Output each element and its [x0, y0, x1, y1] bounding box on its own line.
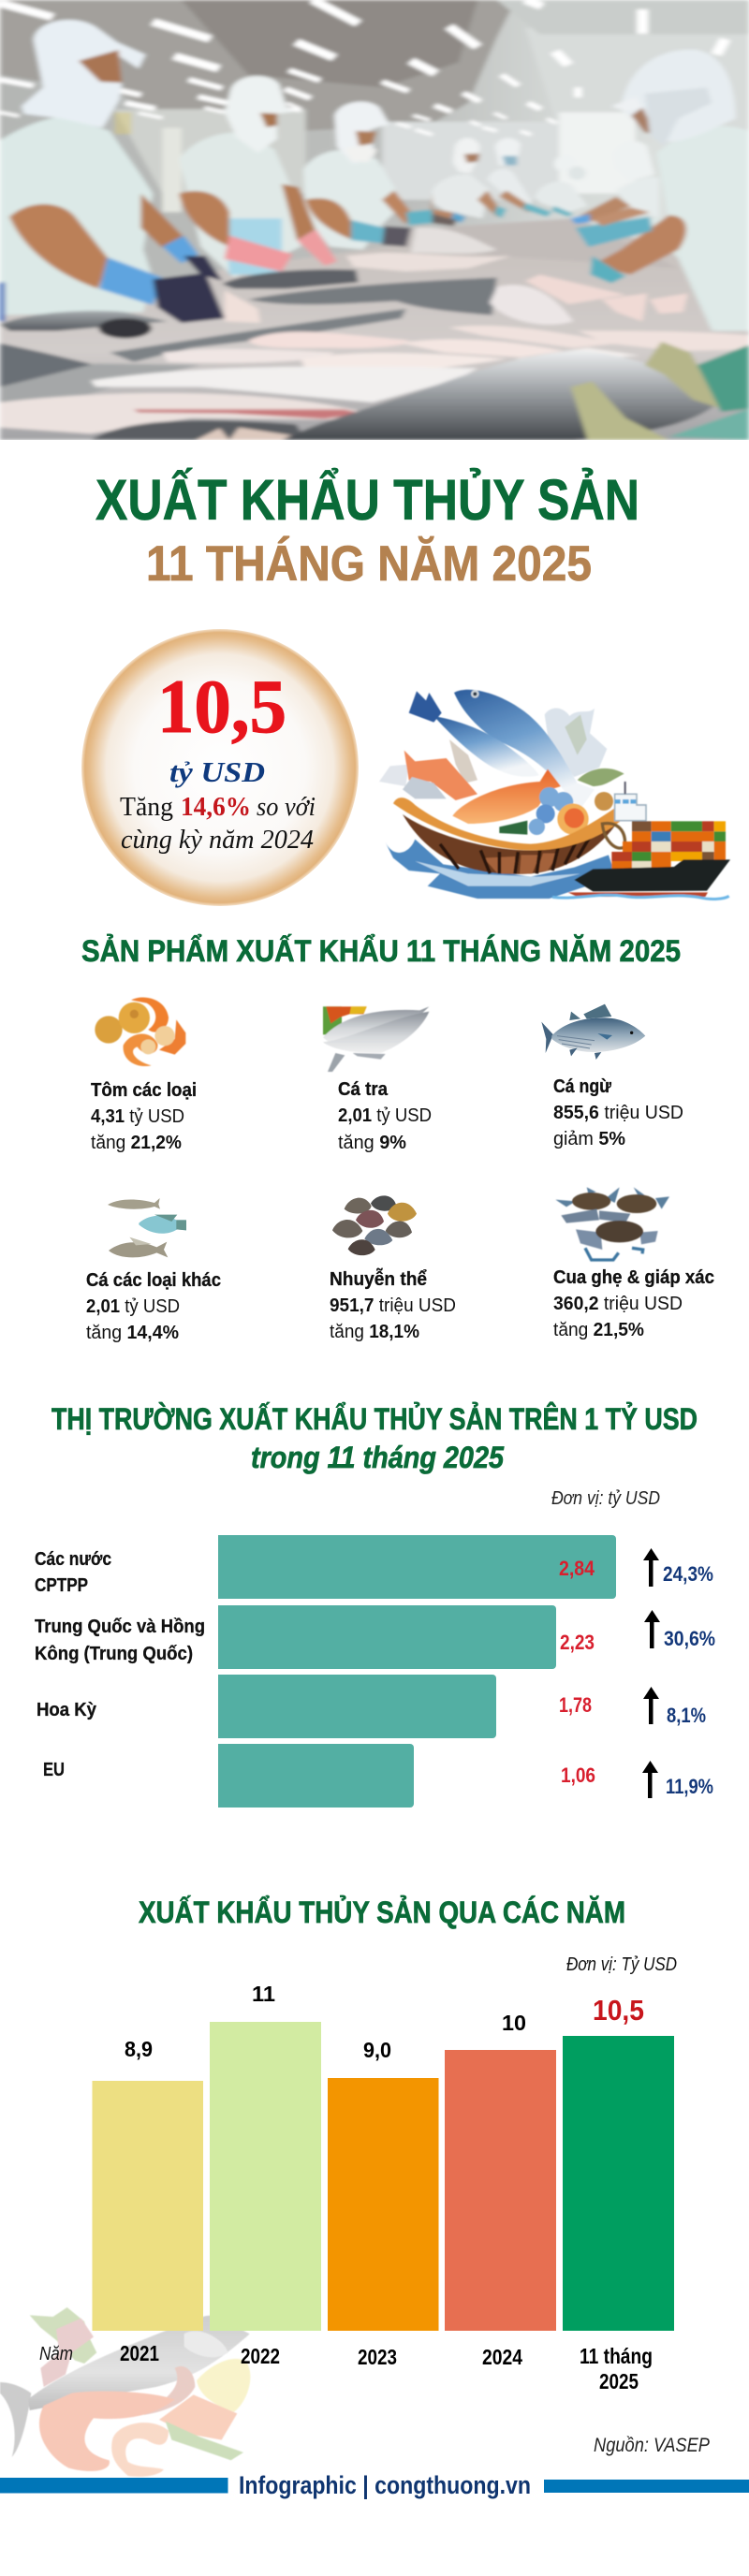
bar: 2024 [445, 2011, 556, 2369]
bar: 11 months 2025: 10,5 [593, 1994, 644, 2027]
icon: crabs [555, 1187, 669, 1260]
row: EU: 1,06 [561, 1764, 595, 1787]
text: shrimp: Tôm các loại [91, 1080, 197, 1101]
fish 2 [433, 716, 539, 777]
worker 2 [179, 133, 301, 278]
bar: 11 months 2025: 11 tháng [580, 2344, 653, 2368]
key figure circle: 10,5 [157, 664, 286, 749]
row: China and Hong Kong: 2,23 [560, 1631, 595, 1654]
bar: 2023: 9,0 [363, 2038, 391, 2062]
row: United States: Hoa Kỳ [37, 1700, 97, 1720]
text: tuna: 855,6 triệu USD [553, 1103, 683, 1123]
title [95, 468, 639, 592]
watermark illustration: seafood [0, 2307, 250, 2477]
ship [615, 794, 646, 821]
bar: 2024: 2024 [482, 2345, 522, 2369]
text: crabs [553, 1267, 714, 1340]
far workers [537, 183, 586, 212]
icon: pangasius [323, 1006, 429, 1072]
text: shrimp: 4,31 tỷ USD [91, 1106, 184, 1127]
text: mollusks [330, 1267, 456, 1342]
icon: other fish [108, 1198, 186, 1257]
orange fish [452, 769, 561, 824]
key figure circle: Tăng [120, 792, 173, 822]
key figure circle: so với [257, 792, 316, 822]
illustration: seafood basket and container ship [379, 690, 730, 899]
bar: 2022 [210, 1982, 321, 2368]
row: CPTPP: Các nước [35, 1549, 111, 1570]
text: other fish: Cá các loại khác [86, 1270, 221, 1291]
bar: 2021: 2021 [120, 2341, 159, 2365]
big fish bottom right [286, 351, 714, 440]
row: China and Hong Kong: Trung Quốc và Hồng [35, 1617, 205, 1637]
bar: 2021 [92, 2037, 203, 2365]
table of fish [0, 218, 749, 440]
text: other fish: tăng 14,4% [86, 1323, 179, 1343]
row: United States [37, 1675, 706, 1738]
heading: products: SẢN PHẨM XUẤT KHẨU 11 THÁNG NĂM 2025 [81, 934, 681, 968]
bar: 2022: 2022 [241, 2344, 280, 2368]
text: shrimp [91, 1080, 197, 1153]
fish on the table: dark skins [222, 270, 359, 288]
heading: markets: trong 11 tháng 2025 [251, 1441, 505, 1474]
text: tuna: Cá ngừ [553, 1076, 611, 1097]
axis label: year: Năm [39, 2344, 73, 2364]
round fish slices [539, 787, 559, 807]
basket [403, 814, 616, 874]
bar: 2023 [328, 2038, 438, 2369]
row: EU [43, 1744, 713, 1808]
row: CPTPP: 24,3% [663, 1562, 713, 1586]
row: CPTPP: CPTPP [35, 1575, 88, 1596]
worker 1 [0, 117, 153, 315]
text: tuna: giảm 5% [553, 1129, 625, 1149]
bar chart: yearly [92, 1982, 674, 2393]
key figure circle [81, 629, 359, 906]
text: mollusks: Nhuyễn thể [330, 1267, 427, 1290]
footer band [0, 2471, 749, 2499]
text: other fish [86, 1270, 221, 1343]
row: China and Hong Kong [35, 1605, 715, 1669]
text: pangasius [338, 1079, 432, 1153]
row: United States: 1,78 [559, 1693, 592, 1717]
text: crabs: 360,2 triệu USD [553, 1294, 683, 1314]
fish 1 [454, 690, 595, 807]
text: other fish: 2,01 tỷ USD [86, 1296, 180, 1317]
row: China and Hong Kong: Kông (Trung Quốc) [35, 1644, 193, 1664]
key figure circle: tỷ USD [169, 755, 265, 788]
bar: 2023: 2023 [358, 2345, 397, 2369]
fillets [411, 227, 497, 254]
text: pangasius: Cá tra [338, 1079, 389, 1100]
hero photo: workers processing pangasius fish [0, 0, 749, 440]
bar chart: markets [35, 1535, 715, 1808]
icon: mollusks [332, 1195, 417, 1255]
unit note: yearly: Đơn vị: Tỷ USD [566, 1954, 677, 1975]
heading: markets [51, 1402, 698, 1474]
text: mollusks: 951,7 triệu USD [330, 1295, 456, 1316]
icon: shrimp [95, 998, 185, 1066]
bar: 2021: 8,9 [125, 2037, 153, 2061]
text: mollusks: tăng 18,1% [330, 1322, 419, 1342]
row: EU: 11,9% [666, 1775, 713, 1798]
source: Nguồn: VASEP [594, 2435, 710, 2456]
bar: 11 months 2025: 2025 [599, 2369, 639, 2393]
row: CPTPP [35, 1535, 713, 1599]
footer band: Infographic | congthuong.vn [239, 2471, 531, 2499]
text: pangasius: tăng 9% [338, 1133, 406, 1153]
text: tuna [553, 1076, 683, 1149]
row: China and Hong Kong: 30,6% [664, 1627, 715, 1650]
heading: yearly: XUẤT KHẨU THỦY SẢN QUA CÁC NĂM [139, 1895, 625, 1929]
bar: 2022: 11 [252, 1982, 275, 2006]
key figure circle: 14,6% [181, 792, 251, 822]
text: crabs: Cua ghẹ & giáp xác [553, 1267, 714, 1288]
title: 11 THÁNG NĂM 2025 [146, 535, 592, 592]
bar: 11 months 2025 [563, 1994, 674, 2393]
bar: 2024: 10 [502, 2011, 526, 2035]
row: EU: EU [43, 1760, 65, 1780]
red fish [449, 739, 477, 783]
worker 3 [303, 151, 402, 250]
text: shrimp: tăng 21,2% [91, 1133, 182, 1153]
row: United States: 8,1% [667, 1704, 706, 1727]
text: pangasius: 2,01 tỷ USD [338, 1105, 432, 1126]
key figure circle: cùng kỳ năm 2024 [121, 825, 314, 855]
row: CPTPP: 2,84 [559, 1557, 595, 1580]
right workers [621, 178, 659, 217]
unit note: markets: Đơn vị: tỷ USD [551, 1488, 660, 1509]
title: XUẤT KHẨU THỦY SẢN [95, 468, 639, 532]
text: crabs: tăng 21,5% [553, 1320, 644, 1340]
hands and sleeves [645, 342, 721, 409]
icon: tuna [541, 1004, 645, 1060]
